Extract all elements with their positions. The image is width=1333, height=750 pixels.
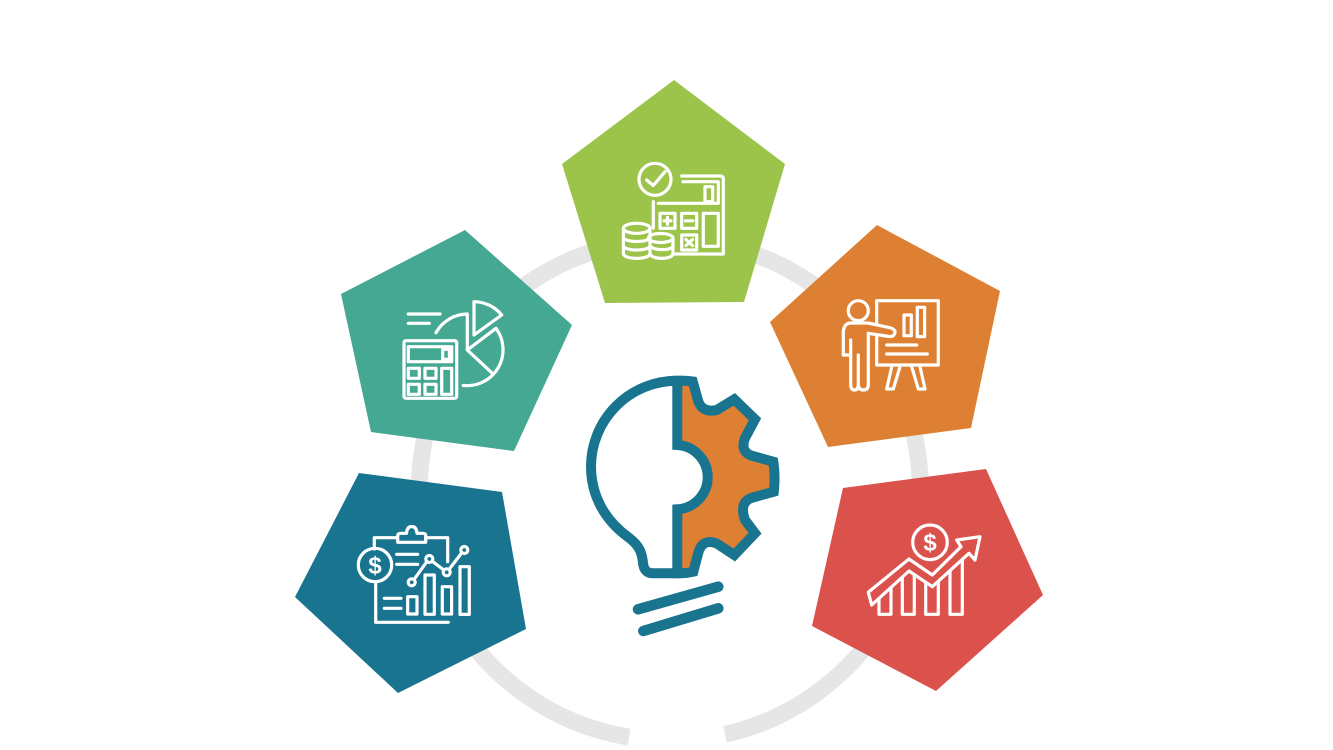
icon: presenter at chart board — [843, 301, 938, 390]
panel: red pentagon — [812, 469, 1043, 691]
icon: clipboard with dollar and charts — [358, 526, 469, 622]
panel: orange pentagon — [770, 225, 1000, 447]
panel: dark blue pentagon — [295, 473, 526, 693]
icon: calculator with pie chart — [404, 302, 503, 398]
gear half — [677, 381, 775, 573]
bulb half — [591, 381, 677, 573]
panel: teal pentagon — [341, 230, 572, 451]
dollar sign: $ — [368, 552, 382, 580]
grey ring — [419, 240, 920, 737]
dollar sign: $ — [923, 530, 937, 556]
icon: calculator with coins and check mark — [623, 163, 723, 258]
panel: green pentagon — [562, 80, 785, 303]
bulb base lines — [638, 587, 718, 631]
central icon: light bulb and gear — [591, 381, 775, 631]
icon: rising arrow with bars and dollar coin — [868, 525, 980, 614]
